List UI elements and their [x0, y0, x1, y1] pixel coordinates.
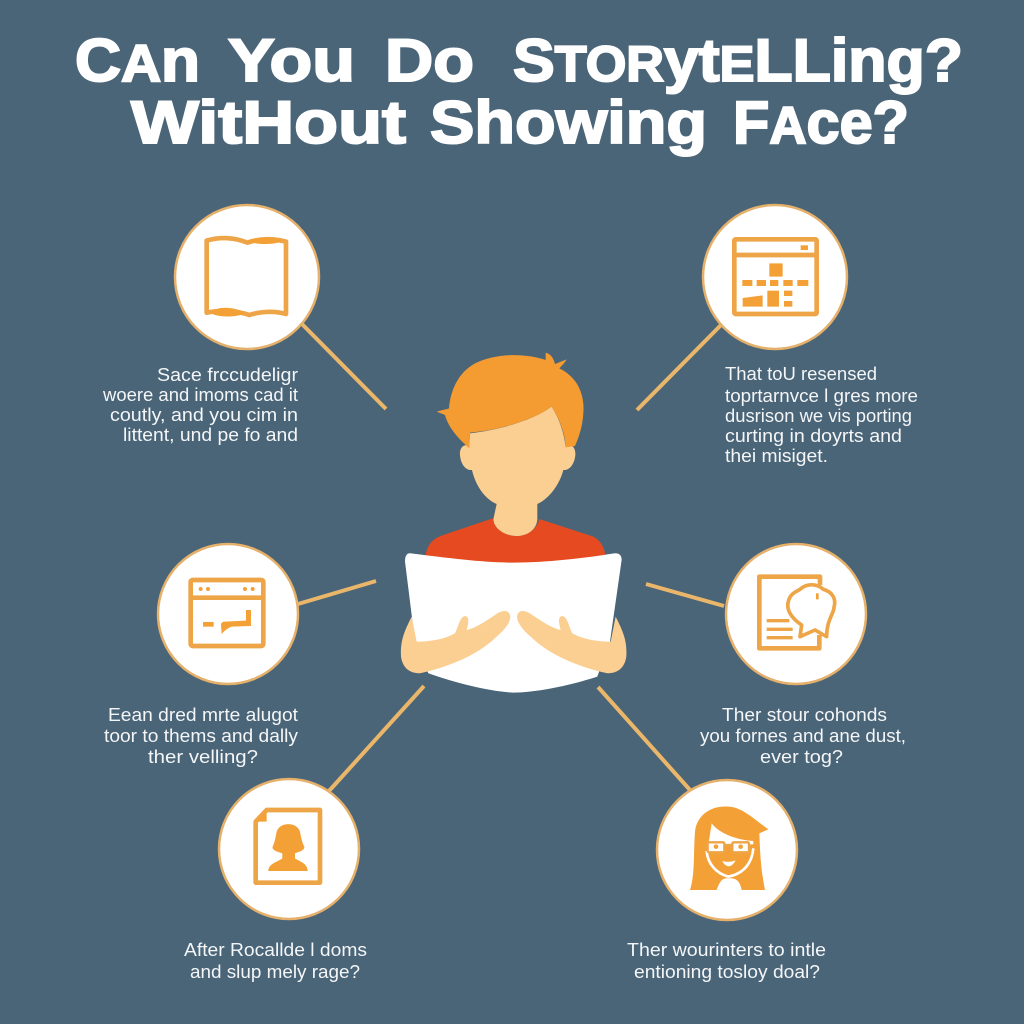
text: middle right	[700, 705, 906, 767]
connector: middle left	[298, 581, 376, 604]
icon: web layout	[734, 239, 817, 314]
panel: top left	[102, 205, 386, 445]
right arm and hand	[517, 611, 626, 673]
title	[75, 27, 963, 156]
badge circle: bottom left	[219, 779, 359, 919]
text: bottom right: Ther wourinters to intle	[627, 940, 826, 960]
text: top left	[102, 365, 298, 445]
connector: top left	[300, 322, 386, 409]
panel: middle left	[104, 544, 376, 767]
text: top right: That toU resensed	[725, 364, 877, 384]
text: bottom right	[627, 940, 826, 982]
panel: top right	[637, 205, 918, 466]
panel: bottom right	[598, 687, 826, 982]
text: middle right: ever tog?	[760, 747, 843, 767]
badge circle: middle left	[158, 544, 298, 684]
text: top right: toprtarnvce l gres more	[725, 386, 918, 406]
badge circle: bottom right	[657, 780, 797, 920]
title: FAce?	[733, 89, 909, 156]
badge circle: top right	[703, 205, 847, 349]
badge circle: middle right	[726, 544, 866, 684]
text: bottom left	[184, 940, 367, 982]
text: middle right: Ther stour cohonds	[722, 705, 887, 725]
text: top right: curting in doyrts and	[725, 426, 902, 446]
panel: bottom left	[184, 686, 424, 982]
title: CAn	[75, 27, 200, 94]
panel: middle right	[646, 544, 906, 767]
text: bottom left: After Rocallde l doms	[184, 940, 367, 960]
ears, face and neck	[460, 407, 575, 536]
title: Do	[385, 27, 474, 94]
text: top left: Sace frccudeligr	[157, 365, 298, 385]
icon: browser window	[191, 580, 263, 646]
text: middle right: you fornes and ane dust,	[700, 726, 906, 746]
hair	[437, 353, 584, 448]
text: top left: coutly, and you cim in	[110, 405, 298, 425]
connector: top right	[637, 325, 721, 410]
text: top right: dusrison we vis porting	[725, 406, 912, 426]
text: middle left: Eean dred mrte alugot	[108, 705, 298, 725]
icon: woman with glasses	[690, 806, 768, 890]
title: You	[228, 27, 355, 94]
icon: document with badge	[759, 577, 835, 648]
text: top left: woere and imoms cad it	[102, 385, 298, 405]
connector: bottom left	[329, 686, 424, 791]
title: Showing	[430, 89, 707, 156]
icon: open book	[207, 237, 286, 317]
shirt	[426, 518, 605, 570]
text: top right	[725, 364, 918, 466]
paper sheet	[405, 553, 622, 693]
text: bottom left: and slup mely rage?	[190, 962, 360, 982]
title: WitHout	[131, 89, 406, 156]
badge circle: top left	[175, 205, 319, 349]
connector: middle right	[646, 584, 724, 606]
title: STORytELLing?	[513, 27, 963, 94]
text: top left: littent, und pe fo and	[123, 425, 298, 445]
text: middle left: ther velling?	[148, 747, 258, 767]
text: top right: thei misiget.	[725, 446, 828, 466]
text: middle left: toor to thems and dally	[104, 726, 298, 746]
icon: profile document	[256, 810, 320, 883]
left arm and hand	[401, 611, 510, 673]
connector: bottom right	[598, 687, 690, 790]
text: bottom right: entioning tosloy doal?	[634, 962, 820, 982]
central figure: faceless person holding paper	[401, 353, 626, 693]
text: middle left	[104, 705, 298, 767]
